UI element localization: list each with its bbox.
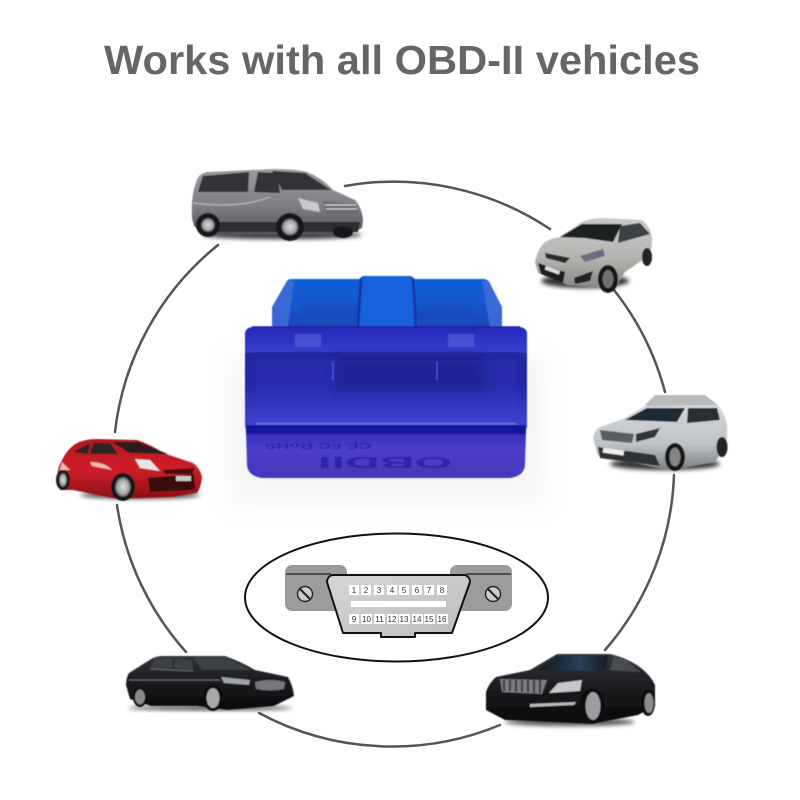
- pin row 1 to 8: 5: [402, 586, 407, 595]
- car: black sedan right: [486, 654, 655, 726]
- left sedan grille: [255, 680, 285, 690]
- device shadow: [228, 355, 546, 505]
- van sill: [196, 222, 360, 232]
- embossed small marking: CE FC RoHS: [263, 441, 372, 450]
- pin row 9 to 16: [349, 614, 448, 624]
- right sedan grille: [500, 679, 547, 694]
- connecting ring: [115, 182, 674, 747]
- adapter lower body: [246, 430, 526, 478]
- van grille: [323, 201, 359, 214]
- left mounting plate: [285, 565, 347, 611]
- pin row 1 to 8: 4: [390, 586, 395, 595]
- hatchback wheels: [598, 265, 618, 293]
- hatchback grille: [545, 253, 570, 263]
- van body: [192, 169, 363, 235]
- SUV grille: [600, 430, 634, 443]
- SUV shadow: [610, 458, 720, 470]
- pin row 1 to 8: [349, 585, 447, 595]
- pin row 1 to 8: 2: [364, 586, 369, 595]
- car: black sedan left: [126, 656, 294, 711]
- red car wheels: [111, 473, 135, 501]
- right mounting plate: [450, 565, 512, 611]
- connector body: [327, 575, 470, 637]
- pin row 1 to 8: 6: [415, 586, 420, 595]
- left sedan wheels: [203, 685, 223, 711]
- adapter rear plug: [272, 279, 502, 327]
- pin row 9 to 16: 15: [425, 615, 434, 624]
- pin row 1 to 8: 3: [377, 586, 382, 595]
- OBD-II adapter device: [245, 276, 527, 478]
- embossed marking: OBDII: [318, 453, 452, 470]
- left sedan windows: [150, 657, 251, 670]
- car: red hatchback: [56, 439, 202, 501]
- pin row 9 to 16: 12: [388, 615, 397, 624]
- title: Works with all OBD-II vehicles: [104, 37, 700, 83]
- car: silver hatchback: [535, 218, 652, 293]
- red car shadow: [80, 491, 200, 499]
- adapter lid: [245, 327, 527, 356]
- van headlight: [298, 198, 320, 212]
- SUV wheels: [665, 443, 685, 471]
- right sedan headlight: [549, 680, 582, 693]
- adapter front window: [245, 352, 527, 434]
- pin row 9 to 16: 14: [413, 615, 422, 624]
- red car headlight and grille: [135, 459, 160, 471]
- right sedan windows: [538, 656, 608, 671]
- car: silver SUV: [593, 395, 728, 471]
- SUV windows: [625, 408, 685, 422]
- left sedan shadow: [128, 706, 292, 710]
- SUV roof box: [645, 395, 718, 407]
- SUV body: [593, 405, 727, 470]
- left screw: [298, 586, 312, 602]
- adapter centre tab: [358, 276, 416, 327]
- pin row 1 to 8: 7: [427, 586, 432, 595]
- pin row 9 to 16: 16: [438, 615, 447, 624]
- pin row 9 to 16: 13: [400, 615, 409, 624]
- pin row 9 to 16: 9: [352, 615, 357, 624]
- hatchback shadow: [541, 274, 629, 288]
- right screw: [486, 586, 500, 602]
- right sedan body: [486, 654, 655, 724]
- hatchback windows: [560, 224, 622, 242]
- pin row 1 to 8: 8: [440, 586, 445, 595]
- car: grey van: [192, 169, 363, 241]
- van wheels: [196, 213, 220, 237]
- red car windows: [112, 442, 168, 454]
- van windows: [198, 171, 331, 193]
- left sedan body: [126, 656, 294, 710]
- hatchback body: [535, 218, 652, 288]
- pin row 1 to 8: 1: [352, 586, 357, 595]
- right sedan wheels: [580, 688, 604, 724]
- pin row 9 to 16: 10: [362, 615, 371, 624]
- port outline ellipse: [245, 534, 548, 662]
- right sedan shadow: [505, 718, 635, 726]
- OBD-II port diagram: [245, 534, 548, 662]
- pin row 9 to 16: 11: [375, 615, 384, 624]
- hatchback headlight: [580, 249, 605, 262]
- van shadow: [202, 231, 362, 239]
- red car body: [57, 439, 202, 499]
- centre bar: [351, 601, 446, 607]
